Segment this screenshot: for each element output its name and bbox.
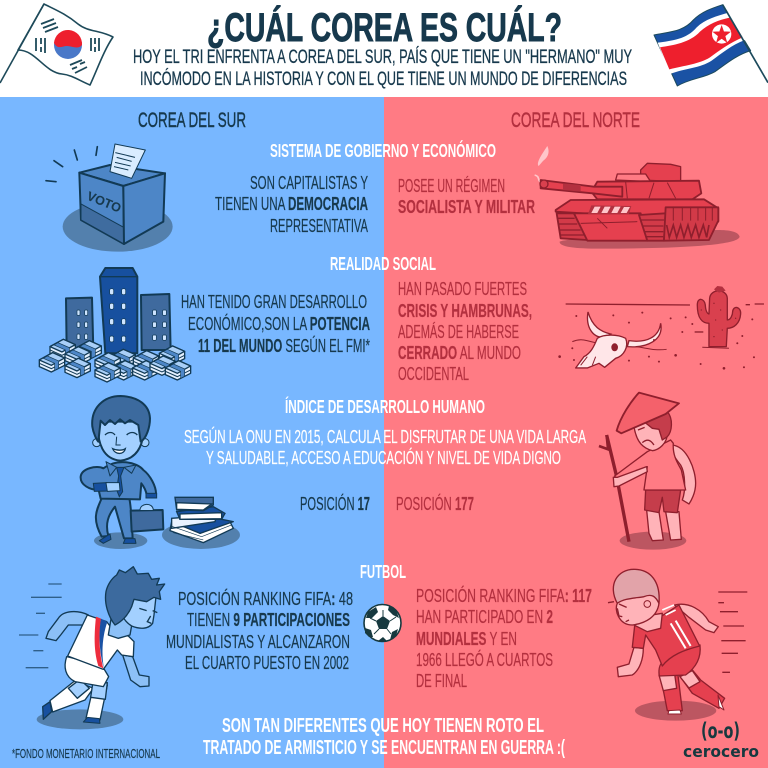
heading: Corea del Norte: COREA DEL NORTE: [511, 109, 640, 132]
text: posición sur: POSICIÓN 17: [300, 493, 370, 514]
closing message: SON TAN DIFERENTES QUE HOY TIENEN ROTO EL: [222, 715, 544, 737]
text: realidad norte: CRISIS Y HAMBRUNAS,: [398, 301, 532, 321]
icon: tank: [535, 146, 740, 249]
text: fútbol sur: EL CUARTO PUESTO EN 2002: [185, 653, 349, 673]
footnote: *FONDO MONETARIO INTERNACIONAL: [12, 746, 160, 761]
text: realidad norte: OCCIDENTAL: [398, 364, 469, 384]
text: realidad norte: ADEMÁS DE HABERSE: [398, 322, 519, 342]
icon: ballot box: VOTO: [85, 189, 123, 216]
panel: Corea del Sur background: [0, 97, 384, 768]
icon: soccer ball: [364, 604, 401, 642]
text: fútbol norte: 1966 LLEGÓ A CUARTOS: [416, 649, 553, 670]
text: fútbol norte: [416, 585, 592, 691]
logo: cerocero: [683, 719, 759, 761]
text: fútbol norte: HAN PARTICIPADO EN 2: [416, 607, 553, 627]
closing message: [203, 715, 565, 759]
text: gobierno sur: SON CAPITALISTAS Y: [250, 173, 368, 193]
illustration: businessman: [81, 396, 163, 549]
section heading: futbol: FUTBOL: [360, 562, 406, 582]
text: realidad sur: ECONÓMICO,SON LA POTENCIA: [188, 313, 370, 334]
logo: cerocero: cerocero: [683, 742, 759, 761]
section heading: realidad social: REALIDAD SOCIAL: [330, 254, 436, 274]
text: realidad sur: [181, 292, 370, 356]
text: fútbol sur: MUNDIALISTAS Y ALCANZARON: [166, 632, 350, 652]
heading: Corea del Sur: COREA DEL SUR: [138, 109, 246, 132]
section heading: indice de desarrollo humano: ÍNDICE DE DESARROLLO HUMANO: [285, 396, 485, 417]
text: fútbol sur: TIENEN 9 PARTICIPACIONES: [187, 610, 350, 630]
panel: Corea del Norte background: [384, 97, 768, 768]
text: explicación IDH: Y SALUDABLE, ACCESO A EDUCACIÓN Y NIVEL DE VIDA DIGNO: [206, 447, 561, 468]
text: posición norte: POSICIÓN 177: [396, 493, 474, 514]
text: gobierno sur: TIENEN UNA DEMOCRACIA: [215, 194, 368, 214]
text: realidad sur: 11 DEL MUNDO SEGÚN EL FMI*: [198, 335, 370, 356]
icon: North Korea flag: [654, 5, 768, 86]
icon: ballot box: [46, 144, 173, 252]
subtitle: [133, 45, 632, 90]
text: realidad norte: CERRADO AL MUNDO: [398, 343, 521, 363]
text: fútbol norte: DE FINAL: [416, 671, 467, 691]
text: fútbol norte: MUNDIALES Y EN: [416, 629, 517, 649]
text: realidad norte: HAN PASADO FUERTES: [398, 279, 527, 299]
title: ¿CUÁL COREA ES CUÁL?: [207, 5, 562, 50]
text: fútbol sur: [166, 588, 353, 673]
icon: South Korea flag: [0, 4, 113, 85]
text: gobierno sur: [215, 173, 368, 236]
illustration: farmer with staff: [599, 393, 696, 550]
logo: cerocero: (o-o): [701, 719, 740, 743]
illustration: North Korean footballer: [608, 569, 747, 721]
text: explicación IDH: [184, 426, 586, 468]
text: gobierno norte: [398, 176, 535, 217]
section heading: sistema de gobierno: SISTEMA DE GOBIERNO Y ECONÓMICO: [270, 140, 496, 161]
text: realidad norte: [398, 279, 532, 384]
icon: buildings and money: [39, 268, 191, 382]
illustration: South Korean footballer: [19, 567, 165, 729]
text: gobierno sur: REPRESENTATIVA: [270, 216, 368, 236]
illustration: desert skull and cactus: [558, 286, 764, 370]
text: gobierno norte: POSEE UN RÉGIMEN: [398, 176, 505, 196]
icon: stack of books: [162, 497, 240, 549]
text: gobierno norte: SOCIALISTA Y MILITAR: [398, 197, 535, 217]
text: realidad sur: HAN TENIDO GRAN DESARROLLO: [181, 292, 367, 312]
text: fútbol sur: POSICIÓN RANKING FIFA: 48: [178, 588, 353, 609]
header background: [0, 0, 768, 97]
text: fútbol norte: POSICIÓN RANKING FIFA: 117: [416, 585, 592, 606]
